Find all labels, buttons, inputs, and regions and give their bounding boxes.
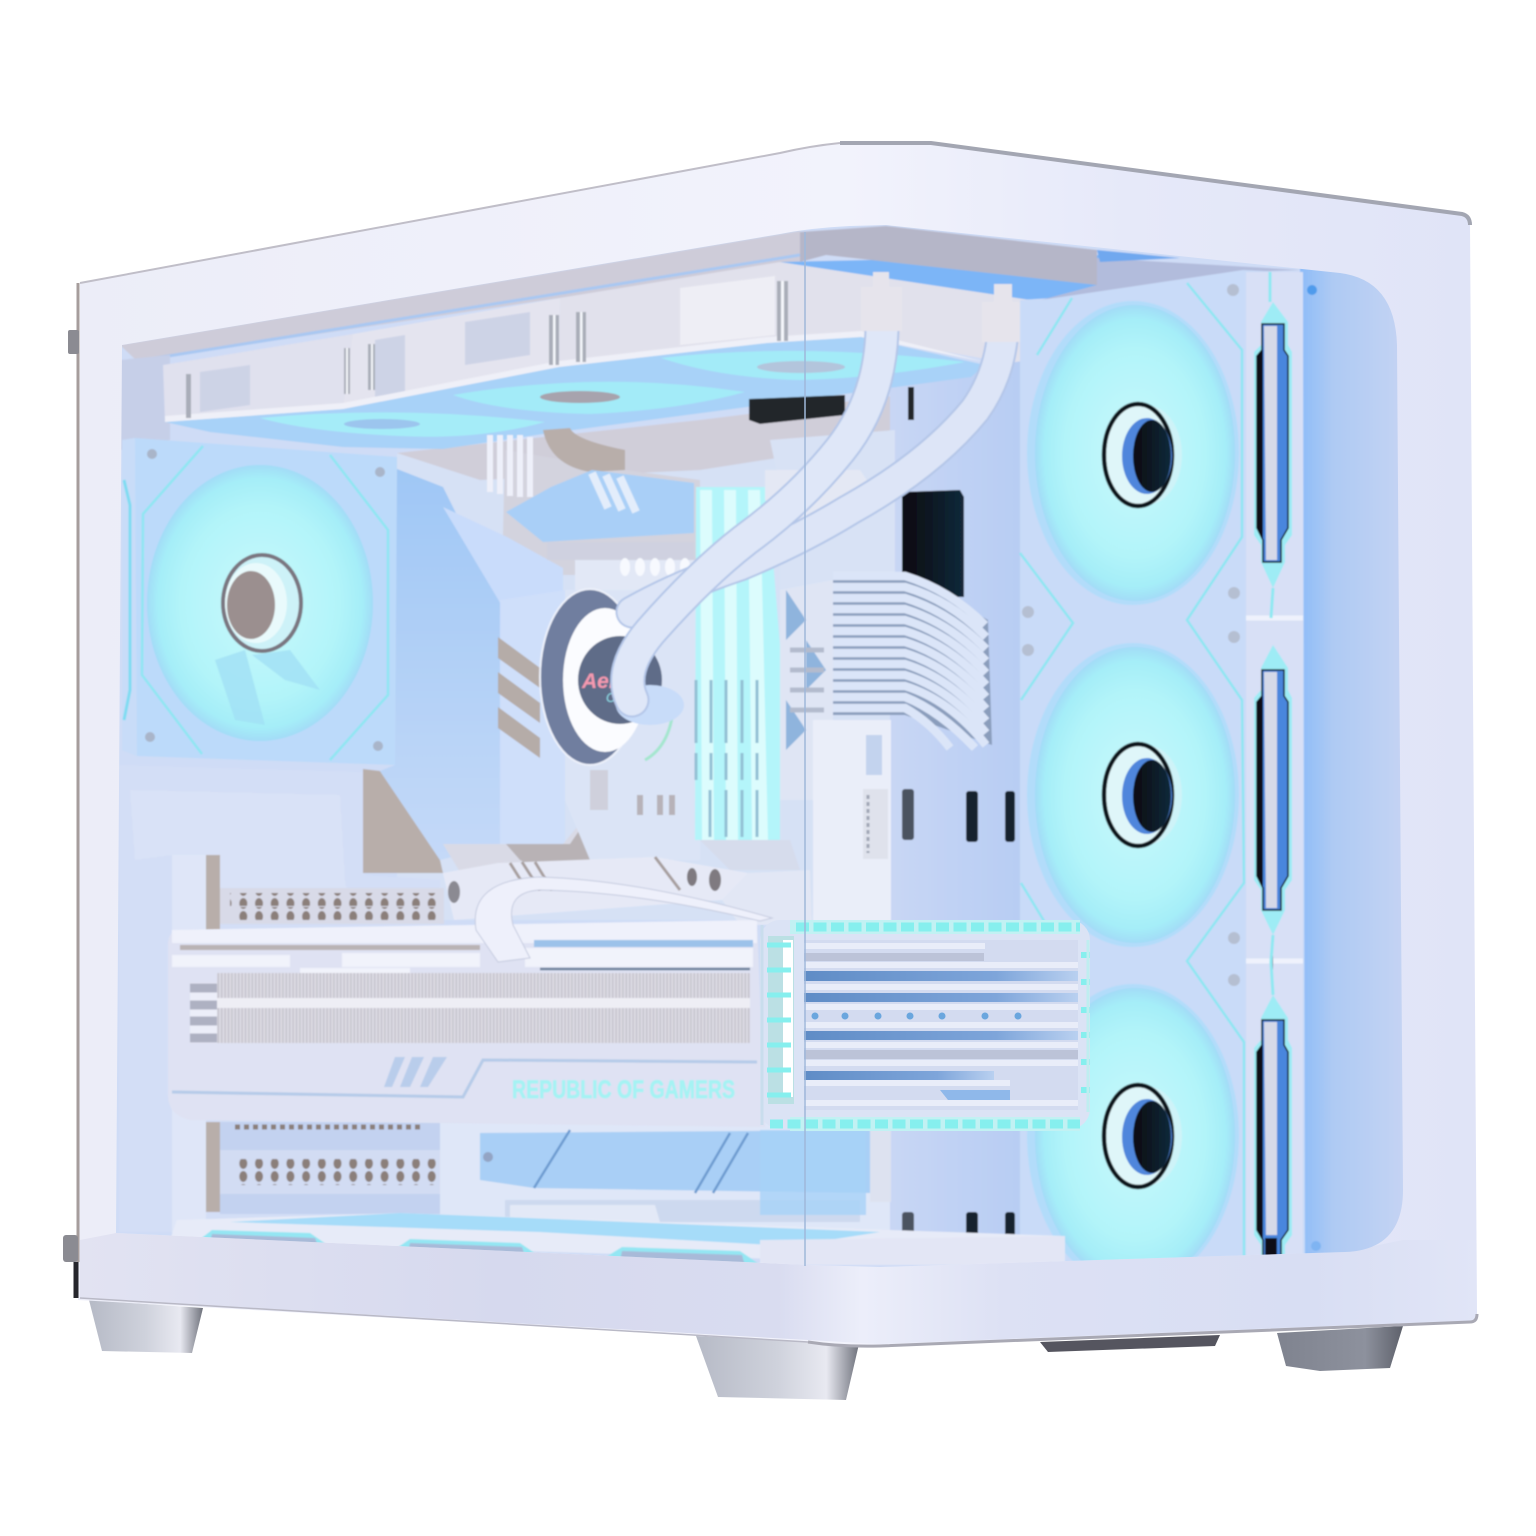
right fan 2 (1027, 643, 1239, 947)
pump elbow (616, 685, 684, 725)
chipset heat spreader behind cables (749, 387, 914, 800)
motherboard tray (397, 385, 1030, 920)
power cable loop (475, 877, 772, 962)
rear exhaust fan (122, 438, 397, 765)
tube to upper pump port (632, 330, 1003, 612)
pump logo: Co (606, 690, 623, 705)
coolant tubes (616, 272, 1024, 725)
glass seam (804, 232, 806, 1266)
product illustration: PC case (63, 141, 1478, 1400)
fan bank vent strip 2 (1254, 645, 1292, 995)
rear cable-side panel (890, 360, 1030, 1240)
rear lower panel (130, 790, 346, 1232)
rear wall under roof (120, 355, 170, 450)
cpu side bracket and VRM heat sink (363, 428, 700, 873)
pump logo (580, 672, 614, 703)
brand text: REPUBLIC OF GAMERS (512, 1076, 735, 1104)
graphics card glass end cap (760, 920, 1090, 1129)
lower blue chamber (440, 1122, 891, 1234)
24-pin cable bundle (833, 572, 992, 748)
cable bundle above heat sink (490, 435, 530, 497)
end cap vent bars (804, 940, 1078, 1110)
fan bank vent strip 1 (1254, 272, 1292, 618)
pump logo: Aero (581, 670, 630, 693)
card logo stripes (384, 1057, 447, 1087)
motherboard area beneath cpu (577, 770, 676, 860)
right fan bank frame (1020, 270, 1321, 1262)
radiator standoffs (186, 281, 788, 418)
pci slot covers upper (220, 888, 444, 924)
ram sticks (695, 487, 780, 840)
top radiator blue plate (165, 281, 985, 449)
pci slot covers lower (220, 1122, 440, 1214)
roof beam and blue strip (780, 226, 1300, 300)
bottom fans shelf (170, 1213, 1065, 1268)
heat sink fins (217, 973, 750, 998)
end cap LED strips (762, 925, 1090, 1125)
fan bank vent strip 3 (1254, 995, 1292, 1262)
interior window (100, 220, 1420, 1288)
right fan 1 (1027, 301, 1239, 605)
right wall with blue glow (1300, 250, 1410, 1270)
roof wedge (120, 231, 800, 361)
card shroud (168, 920, 765, 1127)
pump block (540, 589, 674, 765)
top radiator fan shells (163, 262, 1030, 422)
right fan 3 (1027, 984, 1239, 1288)
graphics card (168, 877, 772, 1127)
connector zone (813, 720, 891, 930)
panel slots (902, 789, 1015, 1236)
cable cut-out (902, 490, 964, 597)
case outer frame (63, 143, 1477, 1346)
hinges (63, 330, 79, 1262)
case feet (89, 1300, 1403, 1400)
slot bracket (443, 840, 812, 925)
